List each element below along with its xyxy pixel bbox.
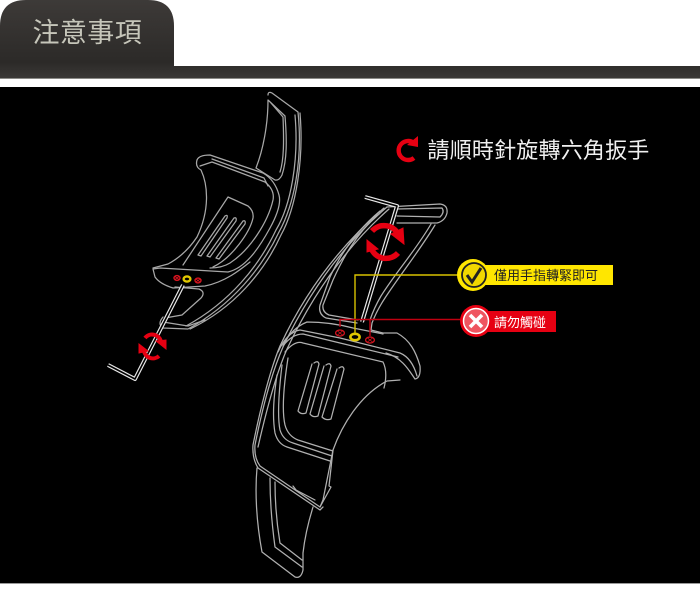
right rotation arrows (367, 226, 404, 258)
callout: finger tighten only: 僅用手指轉緊即可 (494, 268, 598, 283)
right paddle drawing (253, 204, 447, 577)
callout: do not touch: 請勿觸碰 (494, 315, 546, 330)
header bar (0, 0, 700, 79)
left paddle drawing (153, 92, 301, 329)
callout: finger tighten only (457, 259, 613, 291)
red leader lines (340, 320, 462, 336)
left paddle screws (174, 276, 201, 283)
title: 注意事項 (32, 18, 142, 48)
left rotation arrows (139, 334, 166, 358)
left hex key (108, 285, 183, 379)
callout: do not touch (460, 305, 556, 337)
instruction heading: 請順時針旋轉六角扳手 (428, 138, 650, 163)
right paddle screws (336, 330, 374, 343)
icon: clockwise arrow (399, 136, 418, 160)
yellow leader line (355, 275, 460, 333)
right hex key (362, 197, 397, 322)
